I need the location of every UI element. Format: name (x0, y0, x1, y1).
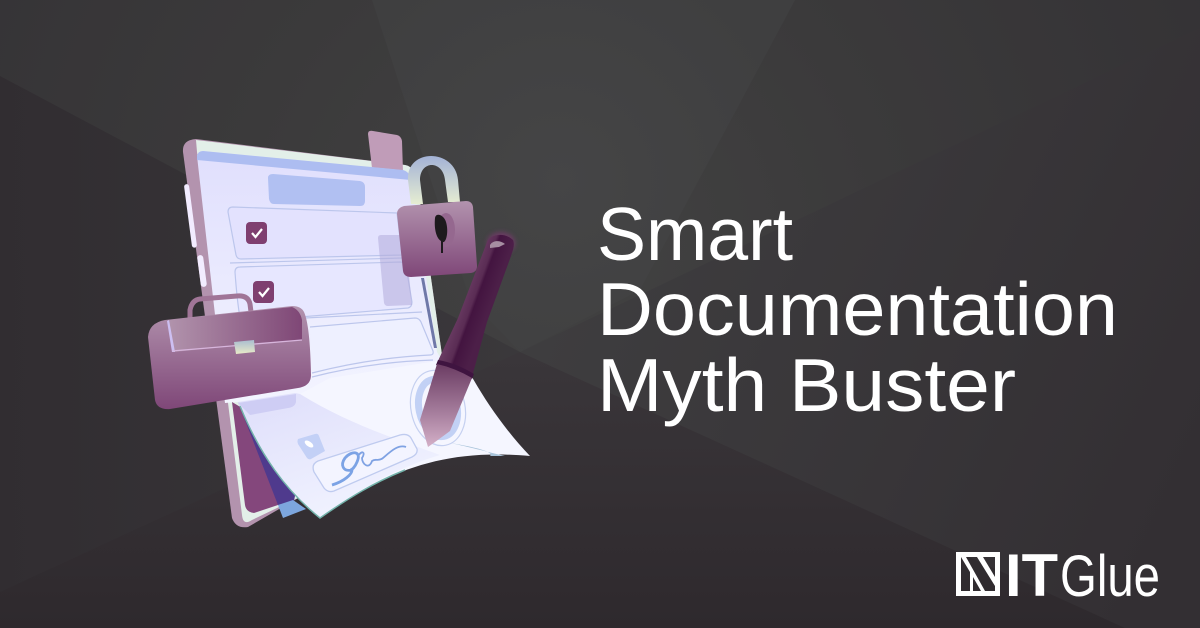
list rules (305, 312, 433, 377)
title: Myth Buster (597, 343, 1016, 427)
list card 2 (235, 262, 412, 318)
seal stamp (404, 365, 472, 451)
title: Smart (597, 192, 793, 276)
list card 1 (228, 207, 402, 263)
pen (420, 232, 515, 447)
logo: IT Glue: Glue (1060, 544, 1160, 609)
logo: IT Glue (956, 542, 1160, 609)
header bar (268, 174, 365, 206)
list card 3 (310, 318, 433, 373)
checkbox 1 (246, 222, 267, 244)
curled paper (238, 360, 530, 518)
translucent panel (378, 235, 412, 306)
title: Documentation (597, 267, 1118, 351)
logo mark (956, 552, 1000, 596)
small icon tile (298, 434, 325, 459)
tablet body (183, 139, 443, 527)
screen edge (421, 278, 437, 348)
title (597, 192, 1118, 427)
signature box (313, 434, 417, 492)
bookmark tab (368, 131, 403, 172)
wordmark: IT (1005, 542, 1058, 609)
paper teal edge (240, 406, 405, 518)
briefcase (148, 296, 311, 409)
checkbox 2 (253, 281, 274, 303)
back cover pages (232, 402, 306, 518)
screen header band (197, 151, 411, 180)
illustration: document, lock, briefcase and pen (148, 131, 530, 527)
tablet screen (197, 151, 443, 403)
padlock (397, 156, 477, 277)
